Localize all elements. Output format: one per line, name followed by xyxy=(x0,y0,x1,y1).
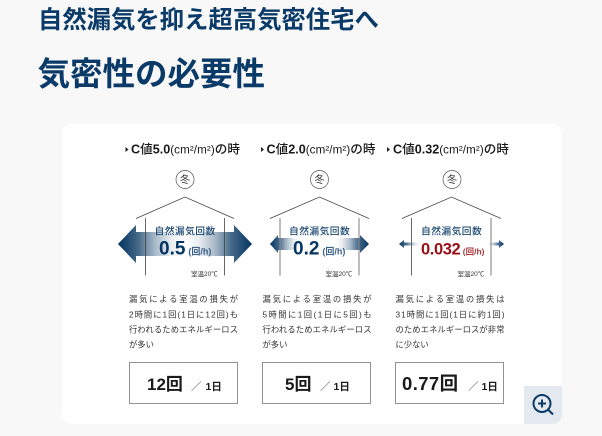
description: 5時間に1回(1日に5回)も xyxy=(262,310,372,320)
icon: winter xyxy=(443,170,461,188)
description: に少ない xyxy=(396,340,429,350)
air change label: 自然漏気回数 xyxy=(421,224,482,238)
house roof and left wall xyxy=(402,197,501,276)
heading: C値2.0(cm²/m²)の時 xyxy=(266,142,376,156)
description: のためエネルギーロスが非常 xyxy=(396,324,504,334)
result box: ／ xyxy=(191,381,202,393)
air change label: 自然漏気回数 xyxy=(289,224,350,238)
result box: ／ xyxy=(468,381,479,393)
description: 漏気による室温の損失が xyxy=(129,294,239,304)
title: 気密性の必要性 xyxy=(38,56,265,92)
arrow: air leakage xyxy=(270,235,369,253)
house right wall xyxy=(490,218,492,276)
description: 漏気による室温の損失が xyxy=(262,294,372,304)
arrow: air leakage xyxy=(399,240,504,248)
arrow: air leakage xyxy=(118,225,252,263)
column 2: C value 2.0 xyxy=(261,142,376,404)
description: 2時間に1回(1日に12回)も xyxy=(129,310,238,320)
description xyxy=(396,294,505,350)
air change value: 0.032 (回/h) xyxy=(421,240,485,258)
zoom button xyxy=(524,386,562,424)
air change label: 自然漏気回数 xyxy=(154,224,216,238)
result box: ／ xyxy=(320,381,331,393)
result box: 1日 xyxy=(206,381,222,393)
column 3: C value 0.32 xyxy=(387,142,509,404)
result box xyxy=(262,362,370,404)
icon: winter: 冬 xyxy=(447,173,457,186)
room temperature: 室温20℃ xyxy=(326,269,353,278)
column 1: C value 5.0 xyxy=(118,142,252,404)
icon: winter: 冬 xyxy=(180,173,190,186)
house walls xyxy=(280,218,359,276)
result box: 0.77回 xyxy=(402,373,459,394)
heading: C値5.0(cm²/m²)の時 xyxy=(131,142,240,156)
result box xyxy=(396,362,504,404)
description: が多い xyxy=(262,340,287,350)
description: 行われるためエネルギーロス xyxy=(129,324,238,334)
icon: winter: 冬 xyxy=(314,173,324,186)
heading: C値0.32(cm²/m²)の時 xyxy=(393,142,509,156)
result box: 1日 xyxy=(334,381,350,393)
result box: 5回 xyxy=(285,375,311,394)
description: 漏気による室温の損失は xyxy=(396,294,504,304)
house roof xyxy=(270,197,369,218)
result box: 1日 xyxy=(482,381,498,393)
icon: winter xyxy=(310,170,328,188)
room temperature: 室温20℃ xyxy=(458,269,485,278)
house outline xyxy=(136,197,234,276)
description: が多い xyxy=(129,340,154,350)
subtitle: 自然漏気を抑え超高気密住宅へ xyxy=(38,7,379,34)
air change value: 0.5 (回/h) xyxy=(159,238,211,260)
description xyxy=(129,294,239,350)
air change value: 0.2 (回/h) xyxy=(293,238,345,260)
description: 行われるためエネルギーロス xyxy=(262,324,372,334)
result box xyxy=(130,362,238,404)
panel xyxy=(62,124,562,424)
room temperature: 室温20℃ xyxy=(191,269,218,278)
description xyxy=(262,294,372,350)
icon: winter xyxy=(176,170,194,188)
description: 31時間に1回(1日に約1回) xyxy=(396,310,505,320)
result box: 12回 xyxy=(147,375,183,394)
